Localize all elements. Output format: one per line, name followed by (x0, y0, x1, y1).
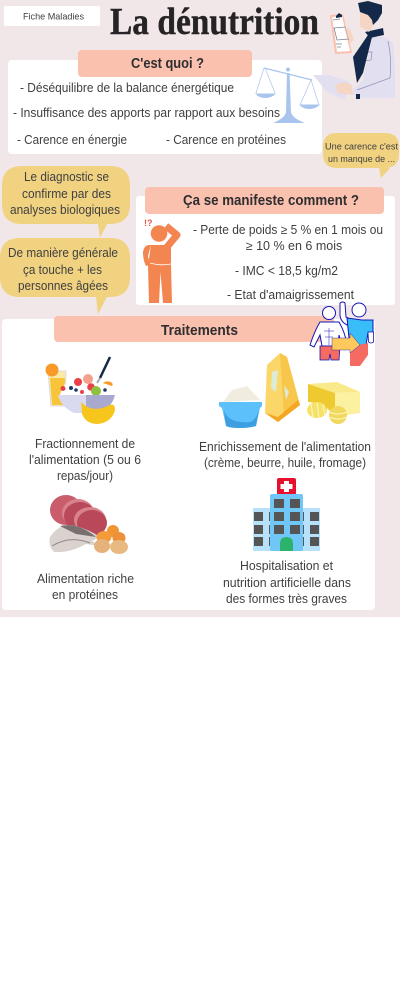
text: hospitalisation: des formes très graves (226, 592, 347, 606)
text: symptoms: - Perte de poids ≥ 5 % en 1 mois ou (193, 223, 383, 237)
callout: diagnostic (2, 166, 130, 238)
text: enrichissement: (crème, beurre, huile, fromage) (204, 456, 366, 470)
callout: carence (323, 133, 399, 178)
heading: Traitements (54, 316, 334, 342)
panel: Traitements (2, 302, 375, 610)
callout: personnes âgées: ça touche + les (23, 263, 102, 277)
icon: weight change people (310, 302, 374, 366)
text: hospitalisation (223, 559, 351, 606)
text: enrichissement: Enrichissement de l'alimentation (199, 440, 371, 454)
callout: diagnostic: analyses biologiques (10, 203, 120, 217)
text: definitions: - Insuffisance des apports par rapport aux besoins (13, 106, 280, 120)
text: protéines (37, 572, 134, 602)
callout: carence: Une carence c'est (325, 142, 398, 152)
text: protéines: en protéines (52, 588, 118, 602)
text: fractionnement: repas/jour) (57, 469, 113, 483)
callout: personnes âgées: personnes âgées (18, 279, 108, 293)
icon: cream, cheese and butter (219, 353, 360, 428)
callout: diagnostic: confirme par des (22, 187, 111, 201)
callout: personnes âgées (0, 238, 130, 314)
text: fractionnement: l'alimentation (5 ou 6 (29, 453, 141, 467)
heading: Traitements: Traitements (161, 323, 238, 339)
callout: carence: un manque de ... (328, 154, 395, 165)
text: definitions (13, 81, 286, 147)
icon: meat, fish and eggs (50, 495, 128, 554)
title: La dénutrition (110, 1, 319, 43)
text: fractionnement: Fractionnement de (35, 437, 135, 451)
tag: Fiche Maladies (4, 6, 100, 26)
callout: personnes âgées: De manière générale (8, 246, 118, 260)
panel: C'est quoi (8, 50, 322, 154)
text: symptoms: ≥ 10 % en 6 mois (246, 239, 342, 253)
icon: hospital (253, 478, 320, 551)
callout: diagnostic: Le diagnostic se (24, 170, 109, 184)
heading: C'est quoi (78, 50, 252, 77)
text: symptoms: - Etat d'amaigrissement (227, 288, 354, 302)
text: hospitalisation: Hospitalisation et (240, 559, 334, 573)
heading: C'est quoi: C'est quoi ? (131, 56, 204, 72)
text: protéines: Alimentation riche (37, 572, 134, 586)
heading: Ça se manifeste comment (145, 187, 384, 214)
heading: Ça se manifeste comment: Ça se manifeste comment ? (183, 193, 359, 209)
text: enrichissement (199, 440, 371, 470)
icon: scales (255, 68, 320, 123)
icon: confused person: !? (144, 218, 152, 228)
text: definitions: - Carence en énergie (17, 133, 127, 147)
panel: Ça se manifeste comment (136, 187, 395, 305)
icon: confused person (143, 218, 177, 303)
text: definitions: - Carence en protéines (166, 133, 286, 147)
text: symptoms: - IMC < 18,5 kg/m2 (235, 264, 338, 278)
icon: fruit bowl and juice (46, 357, 115, 424)
icon: doctor with clipboard (313, 1, 395, 100)
tag: Fiche Maladies: Fiche Maladies (23, 12, 84, 22)
text: definitions: - Déséquilibre de la balance énergétique (20, 81, 234, 95)
text: hospitalisation: nutrition artificielle dans (223, 576, 351, 590)
text: fractionnement (29, 437, 141, 483)
text: symptoms (193, 223, 383, 302)
